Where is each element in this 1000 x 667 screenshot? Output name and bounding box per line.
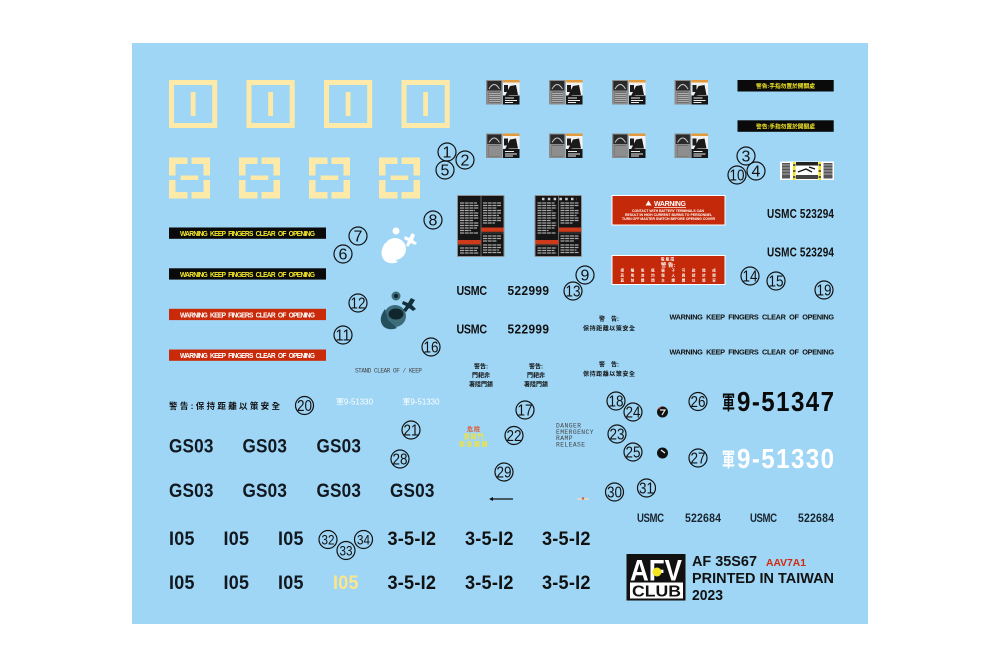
Chinese danger label [459, 426, 489, 448]
USMC serial 522999 [456, 284, 549, 337]
large number black: 軍 [722, 392, 735, 414]
Warning fingers text black: WARNING KEEP FINGERS CLEAR OF OPENING [670, 347, 834, 357]
product text: 2023 [692, 587, 723, 604]
Chinese warning stripes [738, 80, 834, 132]
numbered callouts: 1 [443, 145, 452, 162]
numbered callouts: 9 [581, 268, 590, 285]
numbered callouts: 17 [518, 403, 533, 420]
GS03 markings [169, 434, 434, 501]
105 markings: I05 [333, 571, 358, 593]
USMC serial 522684: USMC [637, 512, 664, 525]
numbered callouts: 33 [340, 542, 353, 558]
3-5-12 markings: 3-5-I2 [465, 571, 513, 593]
danger emergency ramp release text: DANGER [556, 422, 581, 430]
panel: red battery warning [612, 196, 725, 225]
105 markings: I05 [278, 527, 303, 549]
3-5-12 markings: 3-5-I2 [388, 527, 436, 549]
small white numbers [336, 398, 440, 406]
numbered callouts: 24 [626, 405, 641, 422]
numbered callouts: 31 [639, 481, 654, 498]
numbered callouts: 13 [566, 284, 581, 301]
Chinese door warning blocks: 警告: [474, 362, 488, 370]
panel: red Chinese warning [612, 256, 725, 284]
numbered callouts: 18 [608, 394, 624, 411]
panel: red battery warning: TURN OFF MASTER SWITCH BEFORE OPENING COVER [622, 217, 716, 221]
USMC serial 522684 [637, 512, 835, 525]
danger emergency ramp release text: EMERGENCY [556, 429, 594, 436]
numbered callouts: 15 [768, 274, 784, 291]
numbered callouts: 11 [336, 328, 351, 345]
USMC serial 522999: 522999 [508, 322, 549, 337]
panel: red Chinese warning: 警 告: [661, 261, 675, 269]
numbered callouts: 10 [730, 168, 745, 185]
Chinese door warning blocks [469, 362, 548, 388]
USMC serial 522999: USMC [456, 284, 488, 298]
Chinese warning stripes: 警告:手指勿置於開關處 [756, 82, 815, 90]
Chinese door warning blocks: 門耙非 [472, 372, 490, 380]
warning stripes: WARNING KEEP FINGERS CLEAR OF OPENING [180, 353, 315, 360]
numbered callouts: 32 [322, 532, 335, 548]
small red marking [577, 497, 589, 500]
GS03 markings: GS03 [169, 479, 213, 501]
Chinese keep-distance text blocks: 保持距離以策安全 [583, 370, 635, 378]
USMC serial 522684: USMC [750, 512, 777, 525]
numbered callouts: 2 [461, 153, 470, 170]
USMC serial 522684: 522684 [798, 512, 835, 525]
USMC serial 522684: 522684 [685, 512, 722, 525]
GS03 markings: GS03 [316, 479, 361, 501]
Chinese keep-distance text blocks: 警 告: [599, 360, 619, 368]
logo [626, 554, 686, 600]
105 markings: I05 [224, 527, 249, 549]
Chinese danger label: 危險 [467, 426, 481, 434]
USMC serial 523294: USMC 523294 [767, 208, 835, 221]
danger emergency ramp release text [556, 422, 594, 448]
numbered callouts: 5 [441, 163, 450, 180]
Chinese danger label: 署閘門 [463, 434, 485, 441]
numbered callouts: 23 [610, 427, 625, 444]
numbered callouts: 26 [690, 394, 706, 411]
3-5-12 markings: 3-5-I2 [542, 527, 590, 549]
Chinese door warning blocks: 門耙非 [527, 372, 545, 380]
danger emergency ramp release text: RELEASE [556, 442, 585, 448]
logo: CLUB [632, 584, 681, 600]
icon: white emblem [382, 228, 417, 263]
Chinese keep-distance text blocks: 保持距離以策安全 [583, 324, 635, 332]
icon: dark emblem [381, 292, 416, 329]
GS03 markings: GS03 [169, 434, 213, 457]
numbered callouts: 20 [297, 398, 312, 415]
numbered callouts: 25 [626, 445, 641, 462]
numbered callouts: 7 [354, 229, 363, 246]
numbered callouts: 22 [506, 428, 522, 445]
Chinese warning stripes: 警告:手指勿置於開關處 [756, 122, 815, 130]
Chinese door warning blocks: 署陸門鎖 [524, 380, 548, 388]
panel: red Chinese warning: 接觸電瓶端子可能造成 [620, 268, 722, 272]
small multi label [780, 162, 834, 180]
small dial icons [657, 406, 668, 458]
105 markings: I05 [169, 527, 194, 549]
numbered callouts: 3 [742, 149, 751, 166]
numbered callouts: 4 [752, 164, 761, 181]
Chinese door warning blocks: 警告: [529, 362, 543, 370]
USMC serial 522999: 522999 [508, 284, 549, 298]
product text [692, 553, 834, 604]
panel: red Chinese warning: 電瓶端 [661, 256, 675, 262]
105 markings [169, 527, 358, 593]
numbered callouts: 21 [404, 423, 419, 440]
Warning fingers text black: WARNING KEEP FINGERS CLEAR OF OPENING [670, 312, 834, 322]
GS03 markings: GS03 [316, 434, 361, 457]
numbered callouts: 6 [339, 247, 348, 264]
text: stand clear: STAND CLEAR OF / KEEP [355, 368, 422, 374]
large number black: 9-51347 [737, 385, 834, 417]
instruction plates [457, 195, 582, 257]
small white numbers: 軍9-51330 [336, 398, 374, 406]
USMC serial 522999: USMC [456, 323, 488, 337]
danger emergency ramp release text: RAMP [556, 435, 573, 442]
105 markings: I05 [278, 571, 303, 593]
GS03 markings: GS03 [242, 434, 287, 457]
numbered callouts: 19 [816, 283, 832, 300]
numbered callouts: 14 [742, 269, 758, 286]
arrow [489, 497, 513, 501]
numbered callouts: 12 [350, 296, 366, 313]
3-5-12 markings: 3-5-I2 [542, 571, 590, 593]
Chinese keep-distance text blocks: 警 告: [599, 315, 619, 323]
large number white: 9-51330 [737, 442, 834, 474]
Warning fingers text black [670, 312, 834, 357]
3-5-12 markings: 3-5-I2 [388, 571, 436, 593]
decal sheet background [132, 43, 868, 624]
warning pictogram labels [486, 80, 708, 158]
numbered callouts: 28 [392, 452, 408, 469]
logo: AFV [630, 554, 682, 588]
product text: AAV7A1 [766, 558, 806, 569]
Chinese keep-distance text blocks [583, 315, 635, 378]
3-5-12 markings [388, 527, 590, 593]
GS03 markings: GS03 [390, 479, 434, 501]
panel: red battery warning: RESULT IN HIGH CURRENT BURNS TO PERSONNEL [625, 213, 712, 217]
panel: red Chinese warning: 高電流灼傷人員請於開 [620, 272, 722, 278]
Chinese danger label: 緊急開關 [459, 440, 489, 448]
numbered callouts: 27 [690, 451, 706, 468]
3-5-12 markings: 3-5-I2 [465, 527, 513, 549]
warning stripes: WARNING KEEP FINGERS CLEAR OF OPENING [180, 312, 315, 319]
105 markings: I05 [169, 571, 194, 593]
Chinese keep-distance large text: 警告:保持距離以策安全 [169, 401, 280, 411]
large number white: 軍 [722, 449, 735, 471]
small white numbers: 軍9-51330 [402, 398, 440, 406]
USMC serial 523294: USMC 523294 [767, 247, 835, 260]
numbered callouts: 16 [424, 340, 439, 357]
panel: red battery warning: CONTACT WITH BATTERY TERMINALS CAN [632, 209, 705, 213]
Chinese door warning blocks: 署陸門鎖 [469, 380, 493, 388]
numbered callouts: 30 [607, 485, 622, 502]
numbered callouts [296, 143, 833, 560]
panel: red battery warning: WARNING [654, 201, 687, 208]
warning stripes: WARNING KEEP FINGERS CLEAR OF OPENING [180, 271, 315, 279]
product text: AF 35S67 [692, 553, 757, 570]
crop bracket markings row [169, 158, 420, 198]
product text: PRINTED IN TAIWAN [692, 570, 834, 587]
square markings row [172, 82, 447, 126]
numbered callouts: 29 [496, 465, 512, 482]
numbered callouts: 8 [429, 213, 438, 230]
panel: red Chinese warning: 蓋前關閉主開關以策安 [620, 278, 722, 282]
warning stripes: WARNING KEEP FINGERS CLEAR OF OPENING [180, 231, 315, 238]
105 markings: I05 [224, 571, 249, 593]
GS03 markings: GS03 [242, 479, 287, 501]
numbered callouts: 34 [357, 532, 370, 548]
warning stripes [169, 228, 326, 361]
USMC serial 523294 [767, 208, 835, 260]
